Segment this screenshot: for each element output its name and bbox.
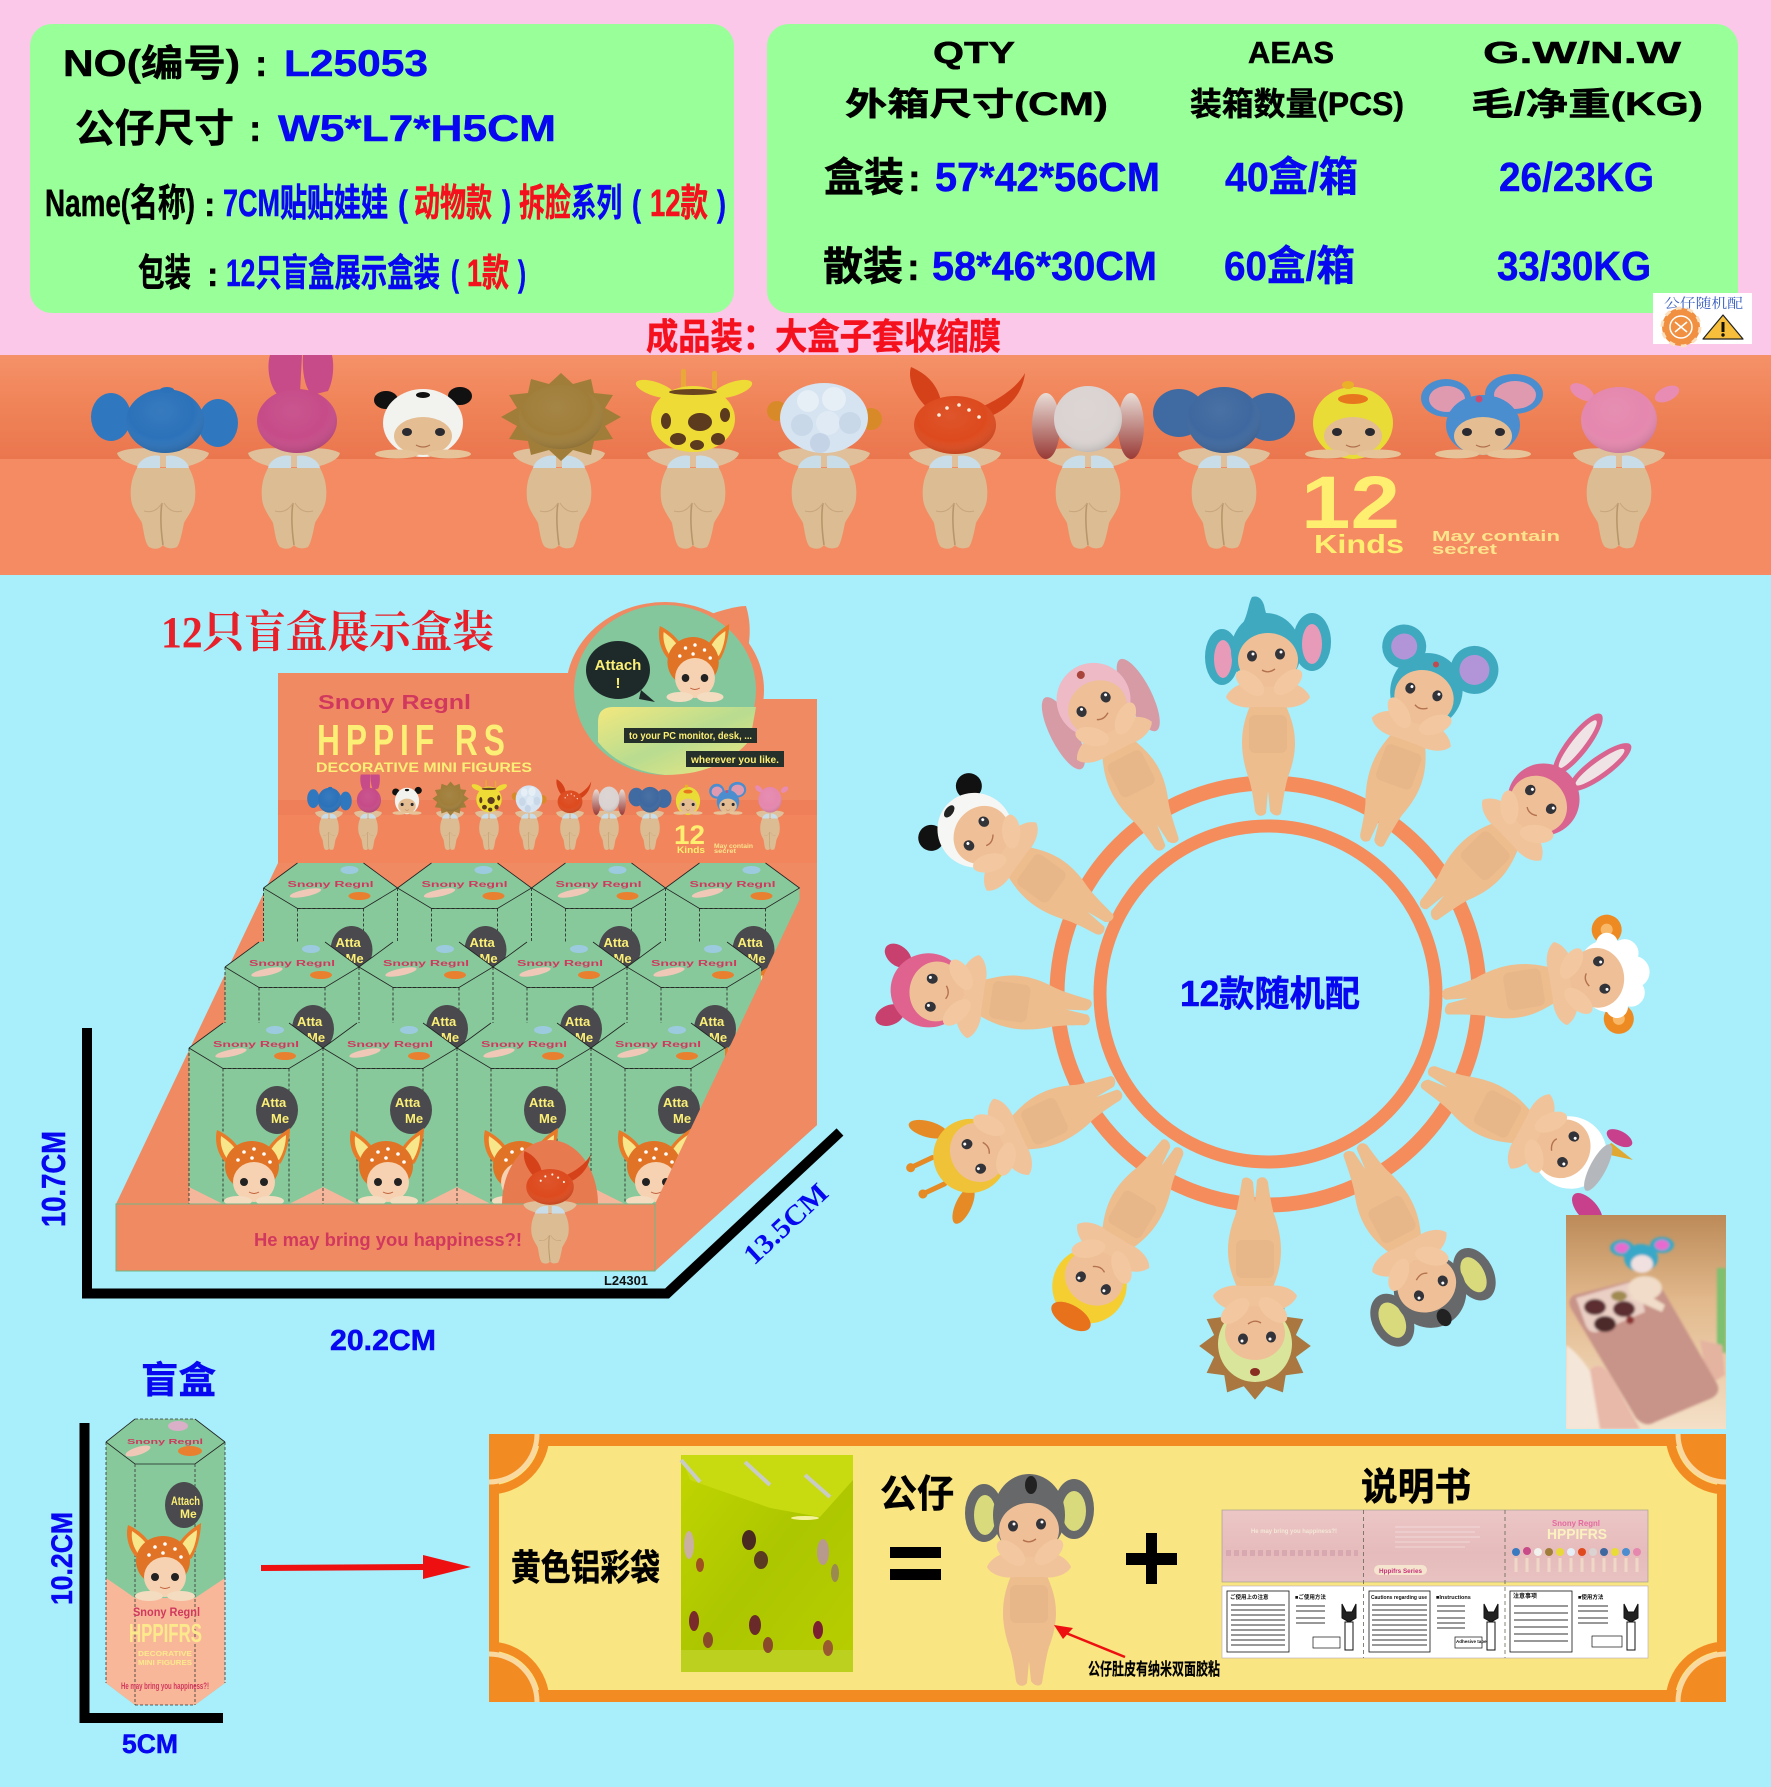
banner corner ornaments [489, 1434, 1726, 1702]
attach circle: ! [616, 675, 620, 692]
packaging line: ( [451, 253, 459, 294]
name line [45, 183, 726, 225]
deer face [127, 1523, 201, 1601]
single blind box [106, 1419, 225, 1705]
figure: elephant [1205, 596, 1331, 816]
figures row [91, 355, 1682, 549]
blind boxes back row: Me [748, 951, 766, 966]
table header chinese: 外箱尺寸(CM) [845, 86, 1108, 122]
display box title: 12只盲盒展示盒装 [161, 608, 494, 657]
blind box dimension lines [84, 1423, 223, 1718]
equals sign [890, 1547, 941, 1580]
back panel logo: HPPIF RS [317, 716, 509, 765]
packaging line: 1款 [467, 253, 509, 295]
dimension: width: 20.2CM [330, 1325, 436, 1357]
adhesive note: 公仔肚皮有纳米双面胶粘 [1088, 1659, 1220, 1679]
speech bubble [165, 1482, 203, 1528]
table header chinese: 装箱数量(PCS) [1190, 86, 1404, 122]
box back panel [278, 602, 817, 863]
figure: unicorn [1398, 1038, 1647, 1234]
manual cover side: Hppifrs Series [1379, 1568, 1422, 1575]
blind boxes middle row: Snony Regnl [249, 959, 335, 968]
blind boxes back row: Atta [470, 935, 496, 950]
pink header background [0, 0, 1771, 355]
blind boxes back row: Snony Regnl [422, 880, 508, 889]
secret note: May contain [1432, 528, 1560, 545]
name line: 动物款 [414, 183, 492, 225]
finished pack note: 成品装：大盒子套收缩膜 [646, 316, 1001, 357]
monitor caption 1: to your PC monitor, desk, ... [629, 731, 752, 742]
tray slogan: He may bring you happiness?! [254, 1230, 522, 1250]
row: bulk: 33/30KG [1497, 243, 1651, 289]
figure: mouse [1316, 615, 1505, 865]
random figure rings [1057, 783, 1479, 1205]
peach panel logo: HPPIFRS [129, 1618, 202, 1648]
tray floor [116, 863, 817, 1271]
blind boxes middle row [225, 942, 761, 1125]
blind boxes front row: Snony Regnl [347, 1040, 433, 1049]
manual label: 说明书 [1361, 1467, 1471, 1509]
blind boxes front row: Me [539, 1111, 557, 1126]
blind boxes back row: Snony Regnl [690, 880, 776, 889]
manual instructions side: ■使用方法 [1578, 1593, 1604, 1601]
blind boxes middle row: Atta [699, 1014, 725, 1029]
manual instructions side: 注意事项 [1513, 1592, 1537, 1600]
blind boxes front row: Atta [395, 1095, 421, 1110]
blind boxes front row: Me [405, 1111, 423, 1126]
blind boxes middle row: Snony Regnl [651, 959, 737, 968]
attach circle [574, 605, 784, 775]
adhesive pointer arrow [1054, 1625, 1125, 1657]
blind boxes middle row: Atta [297, 1014, 323, 1029]
blind boxes back row: Me [480, 951, 498, 966]
panel: product info [30, 24, 734, 313]
speech bubble: Attach [171, 1494, 200, 1508]
secret note [1432, 528, 1560, 558]
blind boxes front row: Me [271, 1111, 289, 1126]
display box [116, 602, 817, 1288]
figure: dog [1028, 642, 1217, 872]
figure: lion [1199, 1177, 1311, 1400]
row: bulk: : [907, 247, 920, 289]
item code: L24301 [604, 1273, 648, 1288]
manual instructions side: ご使用上の注意 [1230, 1593, 1269, 1601]
secret note: secret [1432, 541, 1497, 558]
figure size line [75, 108, 556, 151]
manual cover side [1222, 1510, 1648, 1582]
red arrow [261, 1555, 471, 1579]
row: bulk: 散装 [823, 245, 903, 289]
random warning tag: 公仔随机配 [1664, 295, 1744, 311]
number line: : [255, 43, 267, 84]
peach panel subtitle: DECORATIVE [138, 1649, 192, 1658]
blind boxes back row: Atta [336, 935, 362, 950]
blind boxes middle row: Me [307, 1030, 325, 1045]
packaging line: 12只盲盒展示盒装 [226, 253, 440, 295]
plus sign [1126, 1533, 1177, 1584]
blind box width: 5CM [122, 1729, 178, 1759]
number line: L25053 [284, 43, 428, 84]
back panel subtitle: DECORATIVE MINI FIGURES [316, 760, 532, 775]
blind boxes middle row: Me [441, 1030, 459, 1045]
blind boxes middle row: Me [709, 1030, 727, 1045]
name line: ( [632, 183, 641, 224]
monitor caption 2 [686, 751, 784, 767]
name line: Name(名称) [45, 183, 195, 225]
name line: ) [502, 183, 511, 224]
icon: warning triangle [1703, 315, 1743, 339]
number line [63, 43, 428, 84]
row: boxed: 40盒/箱 [1225, 154, 1358, 200]
manual cover side: He may bring you happiness?! [1251, 1528, 1337, 1535]
blind box height: 10.2CM [46, 1512, 79, 1605]
tray front panel [116, 1204, 655, 1271]
blind boxes middle row: Me [575, 1030, 593, 1045]
row: boxed: 盒装 [824, 156, 904, 200]
peach panel brand: Snony Regnl [133, 1605, 200, 1619]
row: boxed: 57*42*56CM [935, 154, 1160, 200]
name line: : [204, 186, 215, 224]
random warning tag [1653, 293, 1752, 346]
name line: ( [398, 183, 408, 224]
blind boxes back row: Snony Regnl [288, 880, 374, 889]
blind boxes back row [264, 863, 800, 1046]
attach circle: Attach [595, 657, 641, 674]
yellow foil bag [681, 1455, 853, 1672]
figure: rabbit [1397, 698, 1646, 943]
blind boxes front row: Snony Regnl [615, 1040, 701, 1049]
table header chinese [845, 86, 1703, 122]
icon: shuffle chip [1662, 308, 1700, 346]
manual instructions side: ■Instructions [1436, 1595, 1471, 1601]
12 kinds label [1301, 461, 1404, 559]
dimension lines [87, 1028, 840, 1294]
figure: duck [1029, 1123, 1210, 1347]
blind boxes back row: Atta [604, 935, 630, 950]
table header english [933, 35, 1682, 70]
figure size line: : [249, 108, 261, 149]
monitor caption 1 [624, 728, 757, 743]
figure label: 公仔 [880, 1474, 954, 1516]
panel: carton table [767, 24, 1738, 313]
table header english: G.W/N.W [1483, 35, 1682, 70]
panel: contents banner [489, 1434, 1726, 1702]
blind boxes front row: Atta [529, 1095, 555, 1110]
panel: twelve kinds band [0, 355, 1771, 575]
blind boxes front row [189, 1023, 725, 1206]
packaging line: : [207, 256, 218, 294]
monitor caption 2: wherever you like. [690, 755, 779, 766]
back panel brand: Snony Regnl [318, 692, 471, 714]
blind boxes back row: Me [614, 951, 632, 966]
packaging line: ) [518, 253, 526, 294]
12 kinds label: Kinds [1314, 529, 1404, 559]
peach panel slogan: He may bring you happiness?! [121, 1681, 209, 1691]
figure size line: 公仔尺寸 [75, 108, 234, 151]
blind boxes middle row: Snony Regnl [517, 959, 603, 968]
blind boxes front row: Me [673, 1111, 691, 1126]
mini figures band: Kinds [677, 845, 705, 855]
hero circle [502, 1140, 598, 1207]
blind boxes front row: Snony Regnl [481, 1040, 567, 1049]
row: boxed: 26/23KG [1499, 154, 1654, 200]
tray right side [655, 863, 817, 1271]
box top decorations [124, 1421, 203, 1459]
photo: figure on phone [1566, 1215, 1726, 1429]
peach lower panel [106, 1578, 225, 1705]
doll sketches [1342, 1604, 1638, 1650]
blind boxes back row: Atta [738, 935, 764, 950]
blind box heading: 盲盒 [141, 1360, 216, 1401]
foil bag label: 黄色铝彩袋 [511, 1547, 660, 1588]
peach panel subtitle [138, 1649, 192, 1667]
figure: giraffe [887, 1031, 1144, 1238]
table header english: AEAS [1248, 35, 1334, 70]
ring label: 12款随机配 [1180, 973, 1360, 1014]
dimension: height: 10.7CM [35, 1131, 72, 1227]
figure: pig [870, 937, 1097, 1059]
12 kinds label: 12 [1301, 461, 1400, 544]
name line: ) [717, 183, 726, 224]
table header chinese: 毛/净重(KG) [1471, 86, 1703, 122]
box top decorations: Snony Regnl [127, 1439, 203, 1446]
koala figure [965, 1474, 1094, 1686]
blind boxes middle row: Atta [431, 1014, 457, 1029]
manual cover side: Snony Regnl [1552, 1518, 1600, 1528]
blind boxes middle row: Atta [565, 1014, 591, 1029]
name line: 7CM贴贴娃娃 [223, 183, 388, 225]
manual instructions side: Adhesive tape [1456, 1639, 1487, 1644]
hero deer figure [523, 1151, 591, 1264]
blind boxes back row: Me [346, 951, 364, 966]
speech bubble: Me [180, 1507, 197, 1521]
figure: sheep [1434, 909, 1659, 1060]
row: bulk: 58*46*30CM [932, 243, 1157, 289]
row: bulk [823, 243, 1651, 289]
blind boxes front row: Snony Regnl [213, 1040, 299, 1049]
manual instructions side: Cautions regarding use [1371, 1595, 1427, 1601]
row: boxed: : [908, 158, 921, 200]
number line: NO(编号) [63, 43, 240, 84]
blind boxes middle row: Snony Regnl [383, 959, 469, 968]
name line: 12款 [650, 183, 708, 225]
table header english: QTY [933, 35, 1015, 70]
mini figures band [278, 774, 817, 863]
name line: 系列 [571, 183, 622, 225]
manual instructions side: ■ご使用方法 [1295, 1593, 1326, 1601]
row: bulk: 60盒/箱 [1224, 243, 1355, 289]
instruction manual [1222, 1510, 1648, 1658]
mini figures band: secret [714, 849, 736, 855]
figure size line: W5*L7*H5CM [278, 108, 556, 149]
manual instructions side [1222, 1586, 1648, 1658]
manual cover side: HPPIFRS [1547, 1526, 1607, 1543]
peach panel subtitle: MINI FIGURES [138, 1658, 192, 1667]
figure: panda [913, 768, 1134, 963]
name line: 拆脸 [519, 183, 571, 225]
mini figures band: May contain [714, 844, 753, 850]
blind boxes front row: Atta [261, 1095, 287, 1110]
row: boxed [824, 154, 1654, 200]
blind boxes front row: Atta [663, 1095, 689, 1110]
packaging line: 包装 [138, 253, 191, 295]
mini figures band: 12 [674, 820, 705, 850]
dimension: depth: 13.5CM [738, 1178, 835, 1271]
figure: koala [1294, 1116, 1507, 1357]
blind boxes back row: Snony Regnl [556, 880, 642, 889]
